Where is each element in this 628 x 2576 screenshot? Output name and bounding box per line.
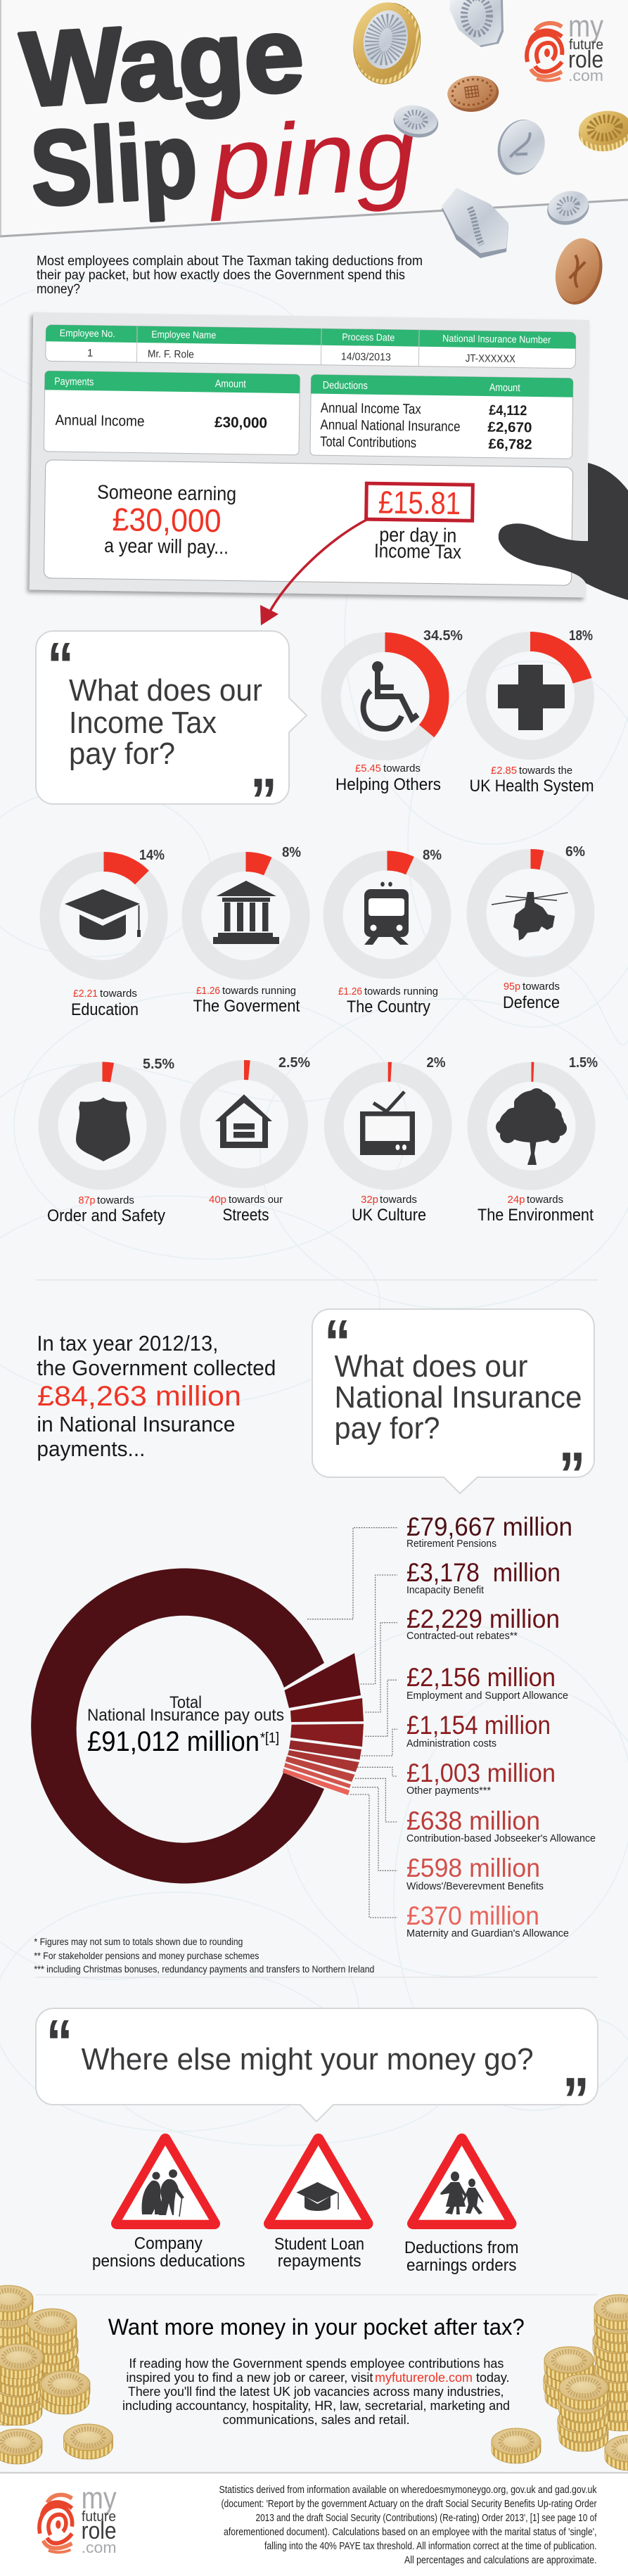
- call to action: If reading how the Government spends employee contributions has: [129, 2357, 504, 2371]
- logo: my future role: [527, 9, 603, 84]
- chart centre total: [87, 1693, 284, 1757]
- warning sign: company pensions: pensions deducations: [92, 2252, 245, 2271]
- coin: one pound right: [576, 108, 628, 155]
- call to action: Want more money in your pocket after tax?: [108, 2314, 525, 2340]
- coin: ten pence: [491, 113, 551, 181]
- callout: what does our income tax pay for: [36, 630, 307, 836]
- callout: what does our national insurance pay for: ”: [558, 1440, 585, 1510]
- callout: where else might your money go: “: [46, 2008, 73, 2078]
- donut: defence 6%: [477, 844, 585, 1012]
- payments table: Amount: [215, 378, 247, 390]
- donut: the government 8%: towards running: [222, 985, 296, 997]
- donut: defence 6%: Defence: [503, 993, 560, 1012]
- footnotes: [34, 1937, 374, 1975]
- donut: helping others 34.5%: £5.45: [355, 763, 381, 774]
- deductions table: Amount: [489, 382, 521, 394]
- icon: hand holding payslip: [499, 463, 628, 600]
- text: national insurance collected: £84,263 million: [37, 1381, 241, 1412]
- chart legend values: £2,156 million: [406, 1663, 556, 1692]
- icon: graduation cap small: [296, 2182, 338, 2211]
- call to action: today.: [476, 2371, 509, 2385]
- donut chart: national insurance pay outs: [31, 1569, 364, 1884]
- donut: the environment 1.5%: The Environment: [478, 1206, 594, 1225]
- donut: the country 8%: towards running: [364, 986, 438, 997]
- chart legend values: £79,667 million: [406, 1512, 572, 1541]
- call to action: including accountancy, hospitality, HR, law, secretarial, marketing and: [122, 2399, 510, 2413]
- donut: the country 8%: [333, 848, 442, 1016]
- employee details table: Process Date: [342, 331, 395, 343]
- coin stacks left: [0, 2285, 113, 2464]
- chart legend values: [406, 1512, 596, 1939]
- coin stacks right: [492, 2295, 628, 2470]
- call to action: inspired you to find a new job or career, visit: [126, 2371, 373, 2385]
- warning sign: deductions from earnings orders: Deductions from: [404, 2238, 519, 2257]
- logo: my future role: role: [568, 46, 603, 73]
- donut: streets 2.5%: 40p: [209, 1194, 226, 1206]
- icon: government building: [213, 881, 279, 944]
- chart legend values: Contracted-out rebates**: [406, 1631, 518, 1642]
- icon: graduation cap: [65, 889, 141, 940]
- employee details table: Employee No.: [60, 327, 115, 339]
- chart connectors: [307, 1528, 397, 1918]
- coin: five pence: [391, 102, 441, 141]
- deductions table: Annual Income Tax: [321, 400, 421, 417]
- donut: the government 8%: [191, 845, 301, 1016]
- donut: education 14%: 14%: [139, 848, 165, 863]
- donut: education 14%: [49, 848, 165, 1019]
- donut: order and safety 5.5%: towards: [97, 1194, 134, 1206]
- call to action: [108, 2314, 525, 2427]
- logo: footer: role: [82, 2518, 117, 2544]
- warning sign: deductions from earnings orders: [404, 2139, 519, 2275]
- coin: two pence: [549, 234, 609, 310]
- donut: defence 6%: 95p: [504, 981, 520, 993]
- warning sign: student loan: Student Loan: [274, 2235, 364, 2254]
- donut: education 14%: £2.21: [73, 988, 98, 1000]
- employee details table: National Insurance Number: [442, 333, 551, 345]
- logo: my future role: future: [569, 37, 603, 53]
- summary box: per day in: [379, 523, 457, 547]
- sources text: [219, 2484, 597, 2566]
- icon: tree: [496, 1088, 567, 1165]
- chart legend values: £1,003 million: [406, 1759, 556, 1787]
- callout: what does our national insurance pay for: “: [324, 1308, 351, 1378]
- text: national insurance collected: [37, 1331, 276, 1461]
- call to action: communications, sales and retail.: [223, 2413, 410, 2427]
- icon: elderly couple: [142, 2169, 184, 2217]
- logo: my future role: my: [568, 9, 603, 44]
- donut: defence 6%: 6%: [565, 844, 585, 860]
- coin: two pound: [345, 0, 428, 90]
- chart centre total: Total: [169, 1693, 202, 1712]
- chart legend values: Contribution-based Jobseeker's Allowance: [406, 1833, 596, 1844]
- chart legend values: Administration costs: [406, 1738, 496, 1749]
- donut: the environment 1.5%: towards: [527, 1194, 563, 1206]
- callout: what does our national insurance pay for: [312, 1308, 594, 1510]
- chart legend values: Incapacity Benefit: [406, 1585, 484, 1596]
- deductions table: £2,670: [487, 420, 532, 435]
- donut: the environment 1.5%: 24p: [508, 1194, 525, 1206]
- chart legend values: Other payments***: [406, 1785, 491, 1797]
- donut: UK culture 2%: towards: [380, 1194, 417, 1206]
- coin: one penny: [445, 72, 501, 115]
- callout: what does our national insurance pay for: What does our: [335, 1349, 527, 1384]
- callout: what does our income tax pay for: pay for?: [69, 737, 175, 771]
- callout: what does our income tax pay for: ”: [250, 766, 277, 836]
- logo: my future role: .com: [568, 67, 603, 84]
- donut: the environment 1.5%: [477, 1055, 598, 1225]
- donut: the country 8%: £1.26: [338, 986, 362, 997]
- intro text: their pay packet, but how exactly does the Government spend this: [37, 268, 405, 283]
- donut: the government 8%: 8%: [282, 845, 301, 860]
- chart centre total: £91,012 million: [87, 1726, 259, 1757]
- warning sign: student loan: [269, 2139, 367, 2271]
- donut: streets 2.5%: towards our: [229, 1194, 283, 1206]
- employee details table: 14/03/2013: [341, 351, 391, 364]
- payments table: £30,000: [214, 414, 267, 431]
- chart legend values: Widows'/Beverevment Benefits: [406, 1881, 544, 1892]
- call to action: There you'll find the latest UK job vacancies across many industries,: [128, 2385, 504, 2399]
- donut: UK health system 18%: £2.85: [491, 765, 517, 777]
- donut: defence 6%: towards: [523, 981, 560, 993]
- donut: streets 2.5%: 2.5%: [278, 1055, 310, 1071]
- chart legend values: £598 million: [406, 1854, 540, 1882]
- text: national insurance collected: payments...: [37, 1436, 145, 1461]
- donut: helping others 34.5%: [331, 628, 463, 794]
- footnotes: *** including Christmas bonuses, redundancy payments and transfers to Northern Ireland: [34, 1964, 374, 1975]
- employee details table: 1: [87, 347, 93, 359]
- chart legend values: £1,154 million: [406, 1711, 551, 1740]
- callout: what does our income tax pay for: Income Tax: [69, 706, 217, 740]
- title: Wage Slipping: Slip: [27, 101, 200, 228]
- donut: UK culture 2%: [334, 1055, 446, 1225]
- payments table: Annual Income: [55, 412, 145, 430]
- coin: fifty pence top: [449, 0, 504, 47]
- warning sign: student loan: repayments: [278, 2252, 361, 2271]
- icon: house: [215, 1095, 272, 1148]
- summary box: £30,000: [112, 501, 222, 539]
- employee details table: Mr. F. Role: [148, 348, 194, 361]
- summary box: a year will pay...: [104, 535, 229, 558]
- callout: where else might your money go: ”: [563, 2065, 589, 2136]
- coin: fifty pence large: [442, 188, 508, 258]
- donut: the government 8%: The Goverment: [193, 997, 300, 1016]
- donut: UK health system 18%: [470, 628, 594, 796]
- icon: children: [440, 2172, 484, 2214]
- summary box: Someone earning: [97, 481, 236, 505]
- deductions table: £4,112: [489, 403, 527, 419]
- donut: streets 2.5%: Streets: [222, 1206, 269, 1225]
- donut: order and safety 5.5%: [47, 1057, 174, 1225]
- text: national insurance collected: in National Insurance: [37, 1412, 235, 1436]
- donut: UK culture 2%: UK Culture: [352, 1206, 426, 1225]
- icon: wheelchair: [364, 661, 418, 729]
- donut: helping others 34.5%: Helping Others: [335, 775, 441, 794]
- warning sign: company pensions: [92, 2139, 245, 2271]
- payments table: [44, 371, 300, 455]
- icon: shield: [76, 1097, 130, 1161]
- callout: what does our national insurance pay for: pay for?: [335, 1411, 440, 1446]
- title: Wage Slipping: [18, 0, 418, 228]
- deductions table: [310, 375, 573, 459]
- chart legend values: Maternity and Guardian's Allowance: [406, 1928, 569, 1939]
- donut: the country 8%: 8%: [423, 848, 442, 863]
- intro text: money?: [37, 282, 80, 297]
- donut: helping others 34.5%: 34.5%: [423, 628, 463, 644]
- employee details table: JT-XXXXXX: [466, 352, 515, 365]
- deductions table: Annual National Insurance: [320, 417, 461, 435]
- donut: education 14%: towards: [100, 988, 137, 1000]
- callout: where else might your money go: [36, 2008, 598, 2136]
- header paper: [0, 0, 628, 236]
- chart legend values: Employment and Support Allowance: [406, 1690, 568, 1702]
- donut: UK health system 18%: UK Health System: [470, 777, 594, 796]
- text: national insurance collected: the Government collected: [37, 1356, 276, 1380]
- chart legend values: £2,229 million: [406, 1605, 560, 1633]
- donut: helping others 34.5%: towards: [383, 763, 421, 774]
- call to action: myfuturerole.com: [375, 2371, 473, 2385]
- summary box: Income Tax: [374, 540, 461, 563]
- callout: what does our income tax pay for: What does our: [69, 673, 262, 708]
- donut: UK culture 2%: 32p: [361, 1194, 378, 1206]
- intro text: [37, 254, 423, 297]
- donut: the country 8%: The Country: [347, 997, 430, 1016]
- donut: streets 2.5%: [190, 1055, 310, 1225]
- footnotes: * Figures may not sum to totals shown due to rounding: [34, 1937, 243, 1947]
- chart legend values: Retirement Pensions: [406, 1538, 496, 1550]
- warning sign: deductions from earnings orders: earnings orders: [406, 2256, 516, 2275]
- chart legend values: £3,178 million: [406, 1558, 560, 1587]
- icon: helicopter: [492, 892, 568, 941]
- deductions table: Total Contributions: [320, 434, 416, 451]
- logo: footer: my: [82, 2481, 117, 2516]
- employee details table: [46, 325, 576, 369]
- payments table: Payments: [54, 376, 94, 388]
- donut: the government 8%: £1.26: [196, 985, 220, 997]
- chart legend values: £638 million: [406, 1806, 540, 1835]
- summary box: [44, 460, 573, 585]
- warning sign: company pensions: Company: [134, 2234, 203, 2253]
- donut: UK culture 2%: 2%: [426, 1055, 446, 1071]
- logo: footer: [39, 2481, 117, 2556]
- footer band: [0, 2472, 628, 2576]
- callout: what does our income tax pay for: “: [47, 630, 74, 701]
- donut: order and safety 5.5%: 5.5%: [143, 1057, 174, 1072]
- arrow to income tax section: [260, 519, 368, 625]
- donut: education 14%: Education: [71, 1000, 139, 1019]
- deductions table: £6,782: [488, 437, 532, 452]
- intro text: Most employees complain about The Taxman taking deductions from: [37, 254, 423, 269]
- donut: UK health system 18%: towards the: [519, 765, 572, 777]
- coin: five pence lower: [544, 187, 592, 229]
- chart legend values: £370 million: [406, 1901, 539, 1930]
- employee details table: Employee Name: [151, 329, 217, 340]
- panel: payslip: [30, 312, 589, 598]
- footnotes: ** For stakeholder pensions and money purchase schemes: [34, 1951, 259, 1961]
- donut: the environment 1.5%: 1.5%: [569, 1055, 598, 1071]
- logo: footer: future: [82, 2509, 116, 2525]
- logo: footer: .com: [82, 2539, 117, 2556]
- donut: UK health system 18%: 18%: [569, 628, 593, 644]
- deductions table: Deductions: [323, 379, 368, 392]
- callout: what does our national insurance pay for: National Insurance: [335, 1380, 582, 1415]
- icon: train: [364, 882, 409, 945]
- donut: order and safety 5.5%: 87p: [79, 1194, 96, 1206]
- callout: where else might your money go: Where else might your money go?: [82, 2042, 534, 2077]
- icon: television: [360, 1092, 415, 1155]
- chart centre total: National Insurance pay outs: [87, 1706, 284, 1725]
- icon: medical cross: [498, 665, 565, 730]
- summary box: £15.81: [378, 484, 461, 521]
- text: national insurance collected: In tax year 2012/13,: [37, 1331, 218, 1356]
- title: Wage Slipping: ping: [204, 95, 418, 222]
- chart centre total: *[1]: [260, 1730, 279, 1746]
- donut: order and safety 5.5%: Order and Safety: [47, 1206, 165, 1225]
